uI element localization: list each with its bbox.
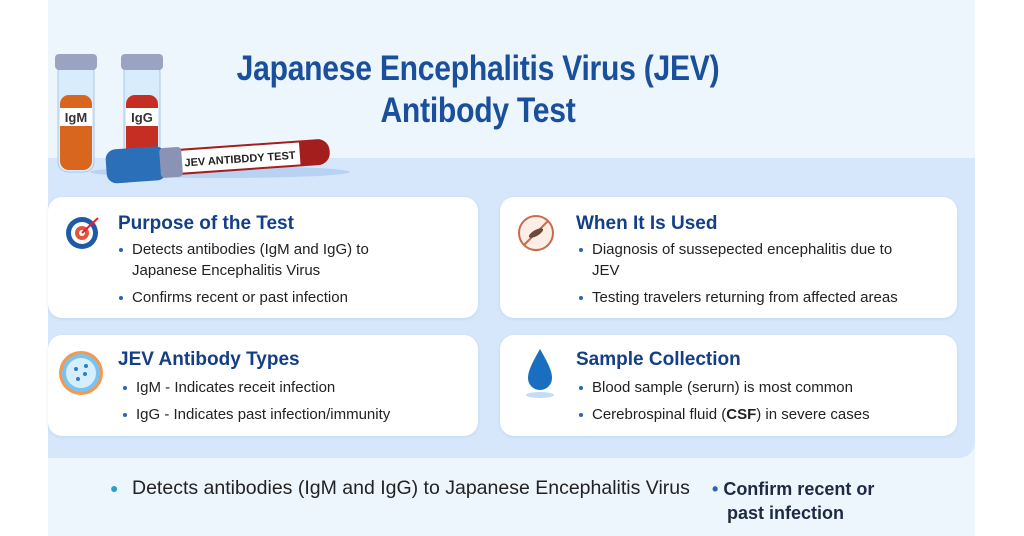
card: antibody types: IgM - Indicates receit infection bbox=[136, 379, 335, 396]
card: sample collection: Cerebrospinal fluid (CSF) in severe cases bbox=[592, 406, 870, 423]
bottom summary: • Confirm recent or bbox=[712, 479, 874, 499]
illustration: test tubes bbox=[55, 54, 350, 184]
icon: virus bbox=[59, 351, 103, 395]
card: sample collection bbox=[500, 335, 957, 436]
inner blue band bbox=[48, 158, 975, 458]
icon: drop bbox=[526, 349, 554, 398]
icon: target bbox=[66, 217, 99, 249]
bottom summary: Detects antibodies (IgM and IgG) to Japanese Encephalitis Virus bbox=[132, 477, 690, 499]
card: purpose: Purpose of the Test bbox=[118, 213, 294, 234]
icon: mosquito bbox=[518, 215, 554, 251]
card: when used: When It Is Used bbox=[576, 213, 717, 234]
icon: dots: ● bbox=[110, 480, 118, 496]
card: when used: Testing travelers returning from affected areas bbox=[592, 289, 898, 306]
illustration: test tubes: IgM bbox=[65, 110, 87, 125]
illustration: test tubes: JEV ANTIBDDY TEST bbox=[184, 150, 296, 169]
illustration: test tubes: IgG bbox=[131, 110, 153, 125]
card: sample collection: Blood sample (serurn) is most common bbox=[592, 379, 853, 396]
card: when used: Diagnosis of sussepected encephalitis due to JEV bbox=[592, 241, 892, 279]
card: purpose: Detects antibodies (IgM and IgG) to Japanese Encephalitis Virus bbox=[132, 241, 369, 279]
card: antibody types: IgG - Indicates past infection/immunity bbox=[136, 406, 390, 423]
card: antibody types bbox=[48, 335, 478, 436]
card: antibody types: JEV Antibody Types bbox=[118, 349, 300, 370]
card: when used bbox=[500, 197, 957, 318]
card: purpose bbox=[48, 197, 478, 318]
title: Antibody Test bbox=[380, 91, 576, 130]
bottom summary: past infection bbox=[727, 503, 844, 523]
card: purpose: Confirms recent or past infection bbox=[132, 289, 348, 306]
title bbox=[237, 49, 719, 130]
title: Japanese Encephalitis Virus (JEV) bbox=[237, 49, 719, 88]
card: sample collection: Sample Collection bbox=[576, 349, 741, 370]
bottom summary bbox=[110, 477, 874, 523]
